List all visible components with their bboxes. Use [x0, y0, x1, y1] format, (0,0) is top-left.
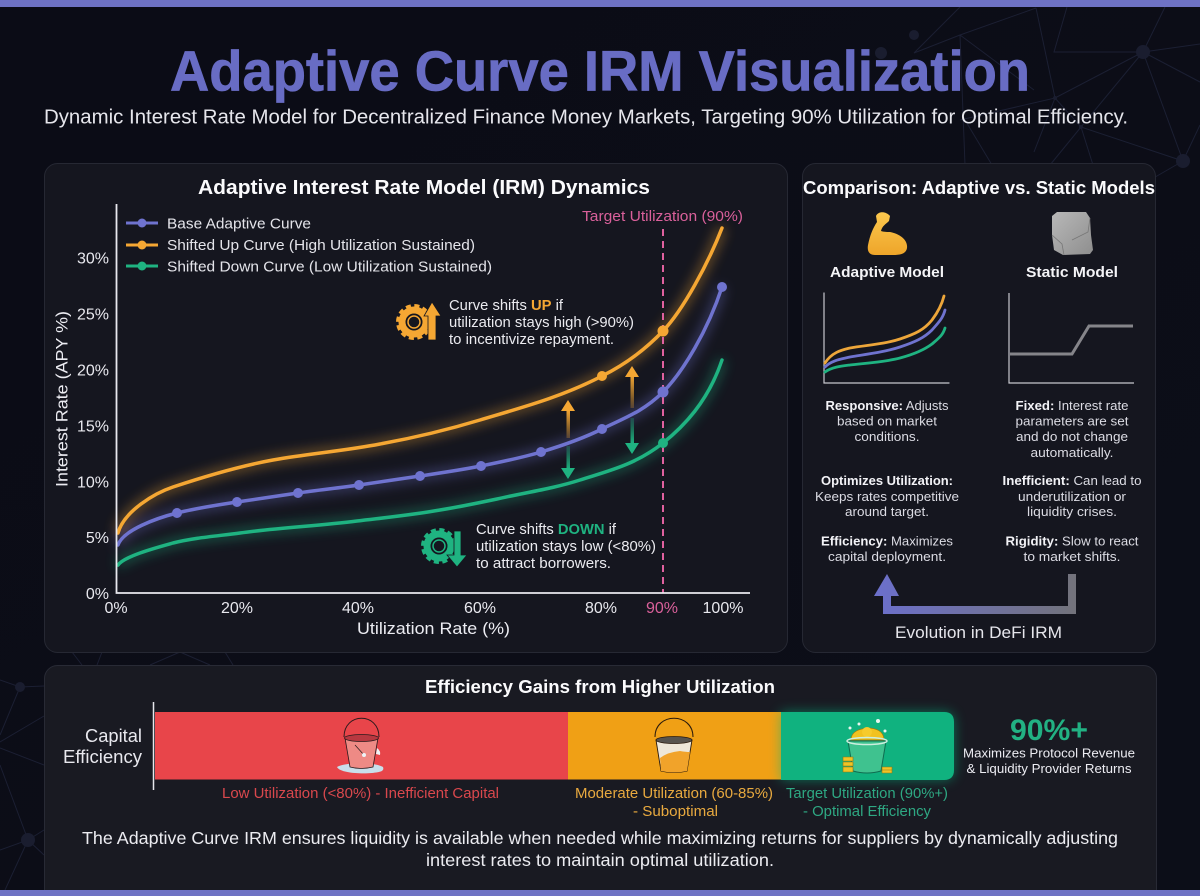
adaptive: optimizes utilization: Optimizes Utilization:	[821, 473, 953, 488]
legend: Shifted Down Curve (Low Utilization Sustained)	[167, 258, 492, 276]
segment glow: target utilization	[781, 712, 954, 780]
target utilization line	[662, 229, 664, 593]
arrows: shift indicators at 75%	[561, 400, 575, 479]
y axis labels: 10%	[77, 474, 109, 492]
shifted down curve	[118, 360, 722, 565]
label: target utilization: - Optimal Efficiency	[803, 804, 932, 820]
adaptive: responsive: conditions.	[854, 429, 920, 444]
summary text	[82, 828, 1118, 870]
callout: curve shifts down: utilization stays low (<80%)	[476, 539, 656, 555]
adaptive: responsive: Responsive: Adjusts	[826, 398, 949, 413]
static: rigidity	[1006, 534, 1139, 564]
target utilization label: Target Utilization (90%)	[582, 209, 743, 225]
callout: curve shifts up: Curve shifts UP if	[449, 298, 564, 314]
icon: gear with up arrow	[398, 302, 441, 340]
static: fixed: automatically.	[1030, 445, 1114, 460]
y axis labels: 25%	[77, 306, 109, 324]
y axis labels: 0%	[86, 586, 109, 603]
axes	[116, 204, 750, 593]
x axis title: Utilization Rate (%)	[357, 620, 510, 638]
stat: 90%+: & Liquidity Provider Returns	[966, 761, 1132, 776]
stat: 90%+	[963, 714, 1135, 776]
x axis labels: 90%	[646, 600, 678, 617]
y axis labels: 30%	[77, 250, 109, 268]
callout: curve shifts down: Curve shifts DOWN if	[476, 522, 617, 538]
legend: Base Adaptive Curve	[167, 216, 311, 232]
label: target utilization: Target Utilization (90%+)	[786, 786, 948, 802]
bar axis	[152, 702, 154, 790]
label: moderate utilization: - Suboptimal	[633, 804, 718, 820]
icon: flexed biceps	[868, 212, 907, 255]
static: inefficient: Inefficient: Can lead to	[1002, 473, 1142, 488]
adaptive: optimizes utilization: Keeps rates competitive	[815, 489, 959, 504]
label: moderate utilization: Moderate Utilization (60-85%)	[575, 786, 773, 802]
adaptive: responsive	[826, 398, 949, 444]
top accent bar	[0, 0, 1200, 7]
adaptive: efficiency	[821, 534, 953, 564]
summary text: The Adaptive Curve IRM ensures liquidity is available when needed while maximizing returns for suppliers by dynamically adjusting	[82, 828, 1118, 848]
callout: curve shifts up	[449, 298, 634, 348]
stat: 90%+: Maximizes Protocol Revenue	[963, 746, 1135, 760]
icon: bucket full of coins	[843, 719, 892, 773]
x axis labels: 20%	[221, 600, 253, 617]
panel: efficiency gains	[44, 666, 1156, 896]
panel: adaptive IRM dynamics chart	[44, 164, 788, 652]
callout: curve shifts up: to incentivize repayment.	[449, 332, 614, 348]
mini chart: adaptive curves	[824, 293, 949, 383]
x axis labels: 80%	[585, 600, 617, 617]
efficiency heading: Efficiency Gains from Higher Utilization	[425, 677, 775, 697]
x axis labels	[104, 600, 743, 617]
x axis labels: 60%	[464, 600, 496, 617]
static: inefficient: underutilization or	[1018, 489, 1127, 504]
panel: comparison of adaptive and static models	[802, 164, 1156, 652]
icon: gear with down arrow	[423, 530, 467, 567]
label: moderate utilization	[575, 786, 773, 820]
legend: Shifted Up Curve (High Utilization Sustained)	[167, 237, 475, 254]
axis label: capital efficiency: Efficiency	[63, 747, 142, 767]
curve glows	[118, 228, 722, 565]
shifted up curve	[118, 228, 722, 533]
icon: leaking bucket	[337, 718, 383, 773]
adaptive: efficiency: Efficiency: Maximizes	[821, 534, 953, 548]
y axis labels: 20%	[77, 362, 109, 380]
mini chart: static curve	[1009, 293, 1134, 383]
icon: rock	[1052, 212, 1093, 255]
subtitle: Dynamic Interest Rate Model for Decentralized Finance Money Markets, Targeting 90% Utilization for Optimal Efficiency.	[44, 106, 1128, 128]
static: fixed: and do not change	[1016, 429, 1128, 444]
segment: moderate utilization	[568, 712, 781, 780]
efficiency bar	[155, 712, 954, 780]
chart heading: Adaptive Interest Rate Model (IRM) Dynamics	[198, 176, 650, 199]
callout: curve shifts down: to attract borrowers.	[476, 556, 611, 572]
static: fixed	[1016, 398, 1129, 460]
static: fixed: parameters are set	[1016, 414, 1129, 428]
static: inefficient	[1002, 473, 1142, 519]
y axis labels: 15%	[77, 418, 109, 436]
title: Adaptive Curve IRM Visualization	[170, 40, 1030, 104]
callout: curve shifts down	[476, 522, 656, 572]
x axis labels: 0%	[104, 600, 128, 617]
static: rigidity: Rigidity: Slow to react	[1006, 534, 1139, 548]
axis label: capital efficiency	[63, 726, 142, 767]
comparison heading: Comparison: Adaptive vs. Static Models	[803, 177, 1155, 198]
y axis title: Interest Rate (APY %)	[54, 311, 72, 487]
evolution caption: Evolution in DeFi IRM	[895, 624, 1062, 642]
segment: target utilization	[781, 712, 954, 780]
y axis labels	[77, 250, 109, 603]
base adaptive curve	[118, 282, 727, 545]
legend	[126, 216, 492, 276]
static model heading: Static Model	[1026, 264, 1118, 281]
bottom accent bar	[0, 890, 1200, 896]
x axis labels: 100%	[703, 600, 743, 617]
label: target utilization	[786, 786, 948, 820]
adaptive: efficiency: capital deployment.	[828, 549, 946, 564]
summary text: interest rates to maintain optimal utilization.	[426, 850, 774, 870]
callout: curve shifts up: utilization stays high (>90%)	[449, 315, 634, 331]
arrows: shift indicators at 85%	[625, 366, 639, 454]
axis label: capital efficiency: Capital	[85, 726, 142, 746]
static: fixed: Fixed: Interest rate	[1016, 398, 1128, 413]
stat: 90%+: 90%+	[1010, 714, 1088, 747]
curve chart	[54, 204, 750, 638]
static: inefficient: liquidity crises.	[1027, 504, 1117, 519]
adaptive: optimizes utilization	[815, 473, 959, 519]
label: low utilization: Low Utilization (<80%) - Inefficient Capital	[222, 786, 499, 802]
segment: low utilization	[155, 712, 568, 780]
adaptive: optimizes utilization: around target.	[845, 504, 929, 519]
static: rigidity: to market shifts.	[1024, 549, 1120, 564]
icon: half-full bucket	[655, 718, 693, 772]
adaptive: responsive: based on market	[837, 414, 937, 428]
x axis labels: 40%	[342, 600, 374, 617]
y axis labels: 5%	[86, 530, 109, 547]
arrow: evolution from static to adaptive	[874, 574, 1076, 614]
adaptive model heading: Adaptive Model	[830, 264, 944, 281]
